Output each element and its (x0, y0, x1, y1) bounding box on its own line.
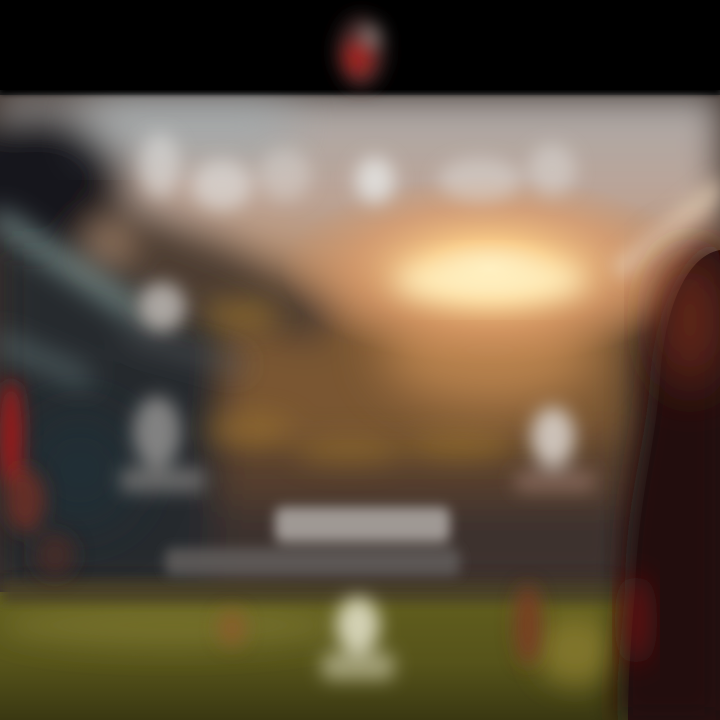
center caption (165, 507, 460, 576)
left stat (120, 282, 205, 492)
golden crowd speckle (200, 299, 515, 463)
bottom center icon (322, 597, 394, 680)
stadium roof beams (0, 220, 240, 378)
dark storm cloud (0, 110, 130, 250)
blue tint on stand (20, 410, 140, 530)
foreground player (617, 235, 720, 720)
blurred player silhouettes (0, 380, 541, 665)
header bar (0, 0, 720, 94)
sun glare (280, 175, 700, 365)
pitch (0, 592, 720, 720)
left trophy block (120, 396, 205, 492)
right sky rim light (610, 175, 720, 280)
left stand (0, 210, 230, 590)
icon: left top (138, 282, 186, 332)
pitch edge blend (0, 582, 720, 602)
right stat (515, 407, 595, 492)
warm glow below sun (380, 295, 600, 405)
middle stand (200, 320, 630, 440)
logo badge (337, 16, 385, 88)
heading (140, 133, 576, 210)
sky (0, 95, 720, 320)
